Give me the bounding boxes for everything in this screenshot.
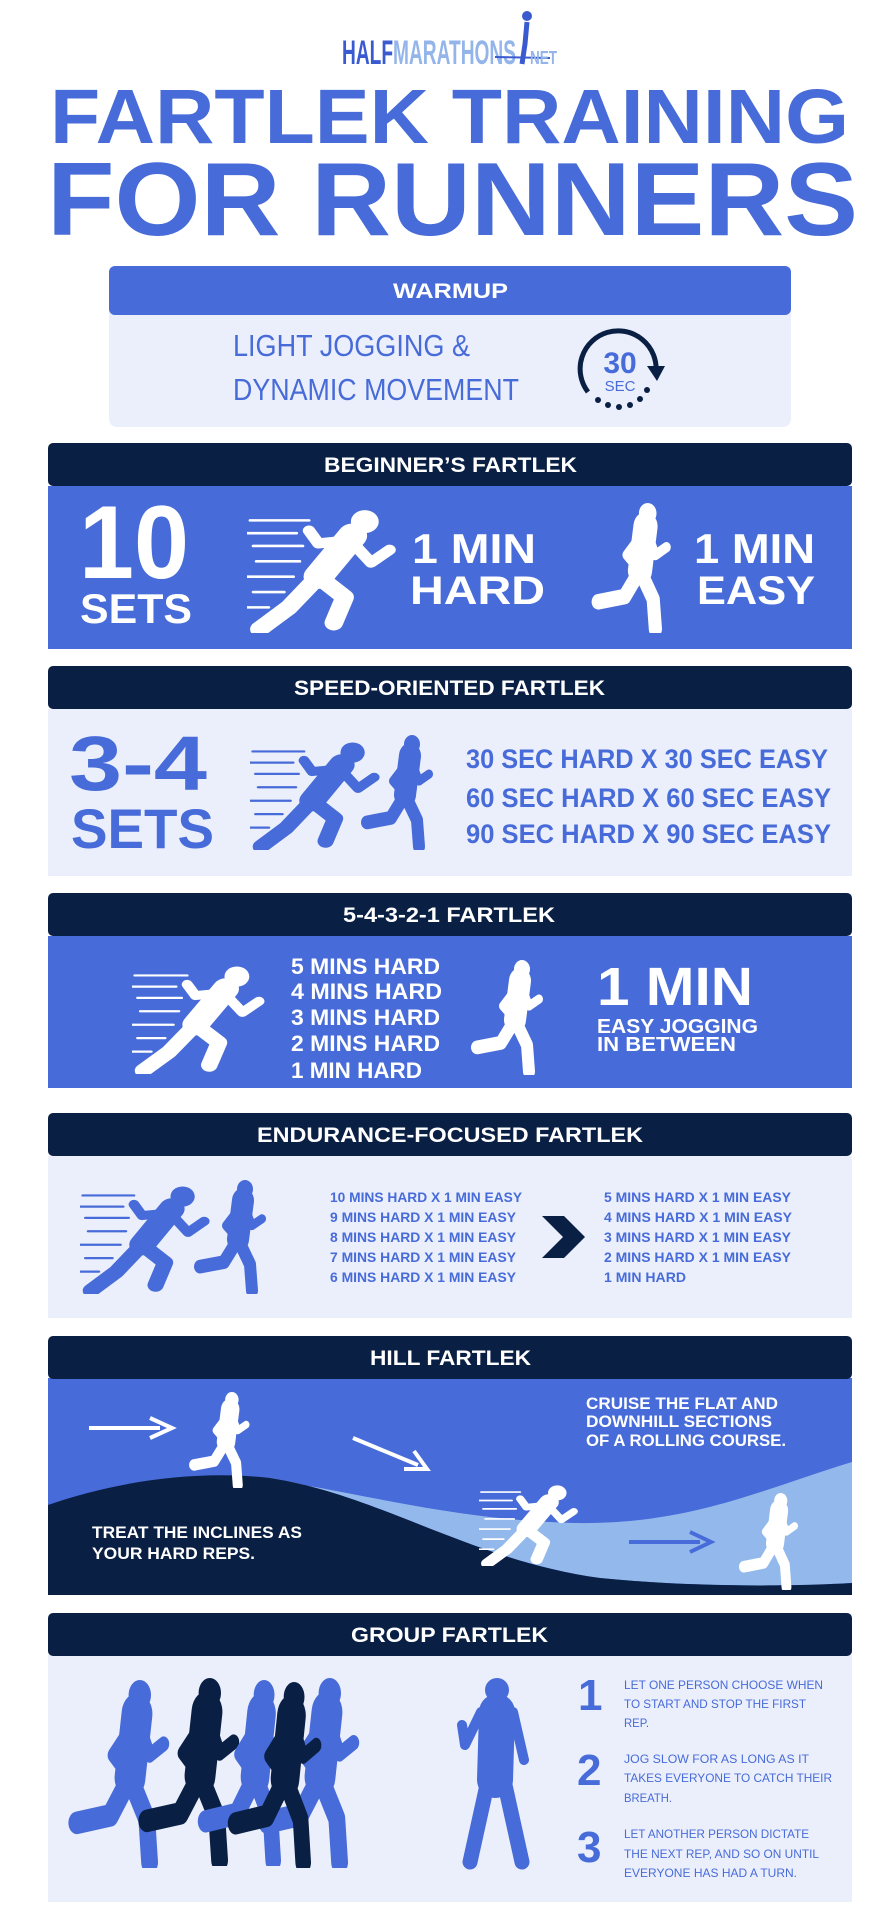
logo: HALFMARATHONS [342, 34, 516, 72]
panel: 5-4-3-2-1 fartlek: 4 MINS HARD [291, 979, 442, 1004]
panel: group fartlek: THE NEXT REP, AND SO ON UNTIL [624, 1847, 819, 1861]
panel: hill fartlek: CRUISE THE FLAT AND [586, 1394, 778, 1413]
panel: warmup: LIGHT JOGGING & [233, 328, 470, 363]
panel: hill fartlek: HILL FARTLEK [370, 1347, 531, 1370]
title: FOR RUNNERS [47, 142, 858, 258]
panel: beginner's fartlek: 1 MIN [412, 525, 536, 572]
icon: timer [580, 331, 665, 410]
panel: endurance-focused fartlek: 8 MINS HARD X 1 MIN EASY [330, 1229, 517, 1245]
panel: beginner's fartlek: 1 MIN [694, 525, 815, 572]
logo [342, 11, 557, 72]
panel: beginner's fartlek: SETS [80, 585, 192, 632]
panel: endurance-focused fartlek: 4 MINS HARD X 1 MIN EASY [604, 1209, 793, 1225]
panel: beginner's fartlek: 10 [79, 485, 189, 601]
panel: group fartlek: LET ONE PERSON CHOOSE WHEN [624, 1678, 823, 1692]
panel: speed-oriented fartlek: 30 SEC HARD X 30 SEC EASY [466, 744, 828, 774]
group of runners [77, 1678, 354, 1862]
panel: group fartlek: LET ANOTHER PERSON DICTATE [624, 1827, 809, 1841]
panel: endurance-focused fartlek: 2 MINS HARD X 1 MIN EASY [604, 1249, 792, 1265]
icon: timer: 30 [603, 347, 637, 380]
panel: group fartlek: JOG SLOW FOR AS LONG AS IT [624, 1752, 810, 1766]
panel: endurance-focused fartlek: 6 MINS HARD X 1 MIN EASY [330, 1269, 517, 1285]
panel: endurance-focused fartlek [48, 1113, 852, 1318]
panel: 5-4-3-2-1 fartlek: 1 MIN HARD [291, 1058, 422, 1083]
panel: beginner's fartlek: BEGINNER’S FARTLEK [324, 454, 577, 477]
title: FARTLEK TRAINING [50, 74, 849, 160]
panel: speed-oriented fartlek: 3-4 [69, 721, 207, 807]
panel: endurance-focused fartlek: 1 MIN HARD [604, 1269, 686, 1285]
panel: beginner's fartlek: EASY [697, 569, 815, 613]
panel: endurance-focused fartlek: 7 MINS HARD X 1 MIN EASY [330, 1249, 517, 1265]
icon: chevron [542, 1216, 585, 1258]
panel: 5-4-3-2-1 fartlek: 3 MINS HARD [291, 1005, 440, 1030]
logo: NET [530, 48, 557, 68]
panel: speed-oriented fartlek: SETS [71, 797, 214, 860]
panel: group fartlek: 3 [577, 1823, 601, 1872]
panel: beginner's fartlek: HARD [410, 569, 545, 613]
panel: 5-4-3-2-1 fartlek [48, 893, 852, 1088]
panel: speed-oriented fartlek: 90 SEC HARD X 90 SEC EASY [466, 819, 831, 849]
arrow [353, 1438, 427, 1469]
panel: speed-oriented fartlek: SPEED-ORIENTED FARTLEK [294, 677, 605, 700]
panel: group fartlek: TO START AND STOP THE FIRST [624, 1697, 807, 1711]
panel: endurance-focused fartlek: 5 MINS HARD X 1 MIN EASY [604, 1189, 792, 1205]
standing man [462, 1678, 524, 1862]
panel: 5-4-3-2-1 fartlek: IN BETWEEN [597, 1034, 736, 1056]
panel: 5-4-3-2-1 fartlek: EASY JOGGING [597, 1016, 758, 1038]
panel: endurance-focused fartlek: 10 MINS HARD X 1 MIN EASY [330, 1189, 523, 1205]
panel: hill fartlek: DOWNHILL SECTIONS [586, 1412, 772, 1431]
panel: endurance-focused fartlek: ENDURANCE-FOCUSED FARTLEK [257, 1124, 643, 1147]
arrow [89, 1418, 172, 1438]
panel: hill fartlek: YOUR HARD REPS. [92, 1544, 255, 1563]
panel: speed-oriented fartlek: 60 SEC HARD X 60 SEC EASY [466, 783, 831, 813]
panel: group fartlek [48, 1613, 852, 1902]
title [47, 74, 858, 258]
panel: beginner's fartlek [48, 443, 852, 649]
panel: group fartlek: BREATH. [624, 1791, 672, 1805]
panel: group fartlek: EVERYONE HAS HAD A TURN. [624, 1866, 797, 1880]
panel: 5-4-3-2-1 fartlek: 1 MIN [597, 957, 753, 1017]
panel: hill fartlek [48, 1336, 852, 1595]
panel: speed-oriented fartlek [48, 666, 852, 876]
panel: group fartlek: GROUP FARTLEK [351, 1624, 548, 1647]
panel: 5-4-3-2-1 fartlek: 5 MINS HARD [291, 954, 440, 979]
panel: 5-4-3-2-1 fartlek: 2 MINS HARD [291, 1031, 440, 1056]
panel: endurance-focused fartlek: 3 MINS HARD X 1 MIN EASY [604, 1229, 792, 1245]
arrow [629, 1532, 711, 1552]
icon: timer: SEC [605, 378, 636, 395]
panel: hill fartlek: OF A ROLLING COURSE. [586, 1431, 786, 1450]
panel: warmup: DYNAMIC MOVEMENT [233, 372, 519, 407]
panel: group fartlek: 2 [577, 1746, 601, 1795]
panel: group fartlek: TAKES EVERYONE TO CATCH THEIR [624, 1771, 832, 1785]
panel: 5-4-3-2-1 fartlek: 5-4-3-2-1 FARTLEK [343, 904, 555, 927]
panel: warmup: WARMUP [393, 280, 508, 303]
panel: endurance-focused fartlek: 9 MINS HARD X 1 MIN EASY [330, 1209, 517, 1225]
panel: hill fartlek: TREAT THE INCLINES AS [92, 1523, 302, 1542]
panel: group fartlek: REP. [624, 1716, 649, 1730]
panel: group fartlek: 1 [578, 1671, 602, 1720]
panel: warmup [109, 266, 791, 427]
